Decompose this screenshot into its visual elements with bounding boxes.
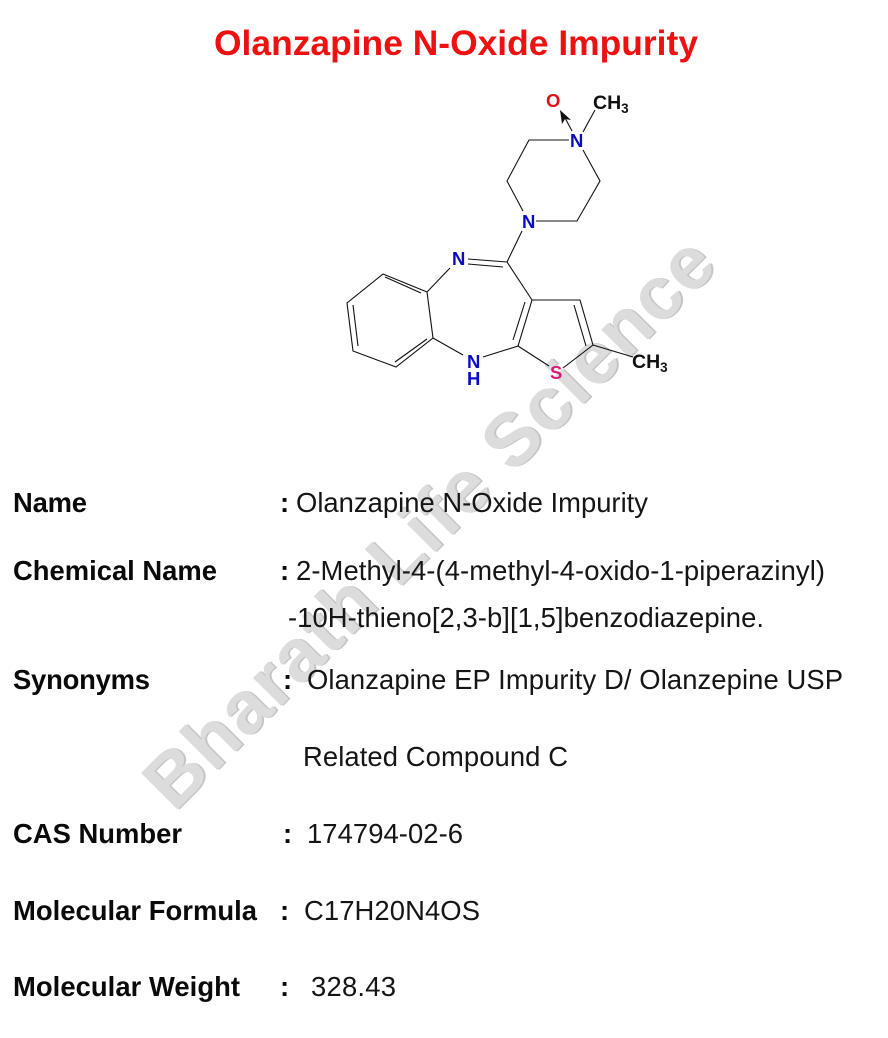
row: molecular weight [13,971,396,1002]
watermark: Bharath Life Science [126,220,730,824]
row: synonyms: : [283,664,292,695]
row: synonyms: Synonyms [13,664,150,695]
row: name [13,487,648,518]
watermark: Bharath Life Science [128,220,733,824]
chemical structure: H [467,368,480,389]
row: name: Name [13,487,87,518]
row: molecular formula: Molecular Formula [13,895,258,926]
row: CAS number: : [283,818,292,849]
row: chemical name: : [280,555,289,586]
row: molecular formula [13,895,480,926]
row: chemical name [13,555,825,633]
atom O: O [546,90,560,111]
methyl top: CH [593,92,621,114]
row: name: Olanzapine N-Oxide Impurity [296,487,648,518]
row: CAS number [13,818,463,849]
row: synonyms [13,664,843,772]
arrow head [560,110,571,124]
row: chemical name: -10H-thieno[2,3-b][1,5]benzodiazepine. [288,602,764,633]
row: molecular weight: : [280,971,289,1002]
row: molecular weight: Molecular Weight [13,971,240,1002]
row: synonyms: Related Compound C [303,741,568,772]
row: chemical name: Chemical Name [13,555,217,586]
atom N piperazine: N [522,211,535,232]
row: molecular weight: 328.43 [311,971,396,1002]
row: name: : [280,487,289,518]
chemical structure [347,90,668,389]
bonds [347,110,633,368]
atom N imine: N [452,248,465,269]
row: CAS number: CAS Number [13,818,182,849]
title: Olanzapine N-Oxide Impurity [214,23,698,63]
row: molecular formula: C17H20N4OS [304,895,480,926]
atom NH: N [467,351,480,372]
row: synonyms: Olanzapine EP Impurity D/ Olanzepine USP [307,664,843,695]
atom S: S [550,362,562,383]
methyl right: 3 [660,360,668,375]
row: molecular formula: : [280,895,289,926]
row: chemical name: 2-Methyl-4-(4-methyl-4-oxido-1-piperazinyl) [296,555,825,586]
methyl right: CH [632,351,660,373]
row: CAS number: 174794-02-6 [307,818,463,849]
methyl top: 3 [621,101,629,116]
atom N top: N [570,130,583,151]
